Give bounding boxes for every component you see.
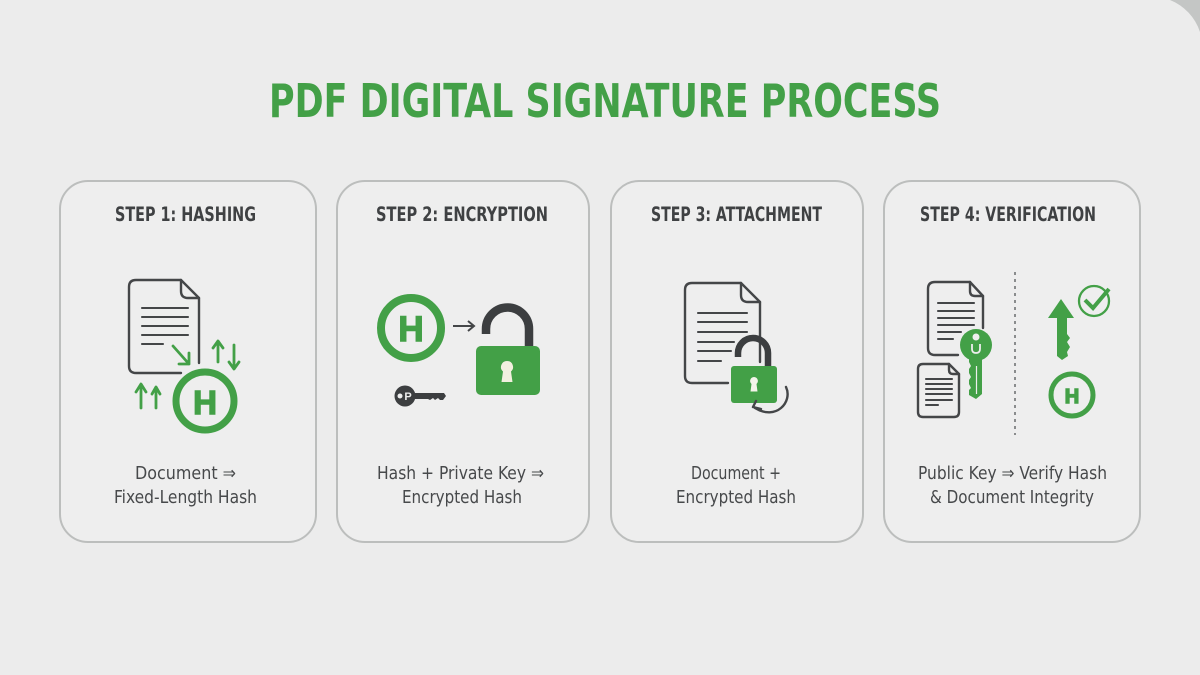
heading: step 2: STEP 2: ENCRYPTION	[376, 203, 548, 226]
icon: document to hash: H	[193, 384, 217, 421]
description: step 3: Document +	[691, 464, 781, 484]
heading: step 4: STEP 4: VERIFICATION	[920, 203, 1096, 226]
divider: dotted	[1014, 272, 1016, 435]
title: PDF DIGITAL SIGNATURE PROCESS	[269, 74, 941, 128]
description: step 4: & Document Integrity	[930, 488, 1094, 508]
icon: hash to lock with private key	[381, 298, 540, 406]
panel: step 4 verification	[884, 181, 1140, 542]
panel: step 1 hashing	[60, 181, 316, 542]
panel: step 3 attachment	[611, 181, 863, 542]
panel: step 2 encryption	[337, 181, 589, 542]
icon: hash to lock with private key: P	[404, 391, 412, 403]
description: step 3: Encrypted Hash	[676, 488, 796, 508]
icon: document with lock	[685, 283, 788, 412]
description: step 1: Fixed-Length Hash	[114, 488, 257, 508]
description: step 2: Encrypted Hash	[402, 488, 522, 508]
description: step 1	[114, 464, 257, 508]
icon: document to hash	[129, 280, 239, 430]
icon: documents with public key	[918, 282, 992, 417]
heading: step 3: STEP 3: ATTACHMENT	[651, 203, 822, 226]
icon: verified key and hash: H	[1065, 386, 1079, 408]
description: step 3	[676, 464, 796, 508]
description: step 4: Public Key ⇒ Verify Hash	[918, 464, 1107, 484]
icon: hash to lock with private key: H	[398, 310, 424, 349]
description: step 4	[918, 464, 1107, 508]
description: step 1: Document ⇒	[135, 464, 236, 484]
description: step 2: Hash + Private Key ⇒	[377, 464, 544, 484]
description: step 2	[377, 464, 544, 508]
heading: step 1: STEP 1: HASHING	[115, 203, 256, 226]
icon: verified key and hash	[1048, 286, 1109, 416]
